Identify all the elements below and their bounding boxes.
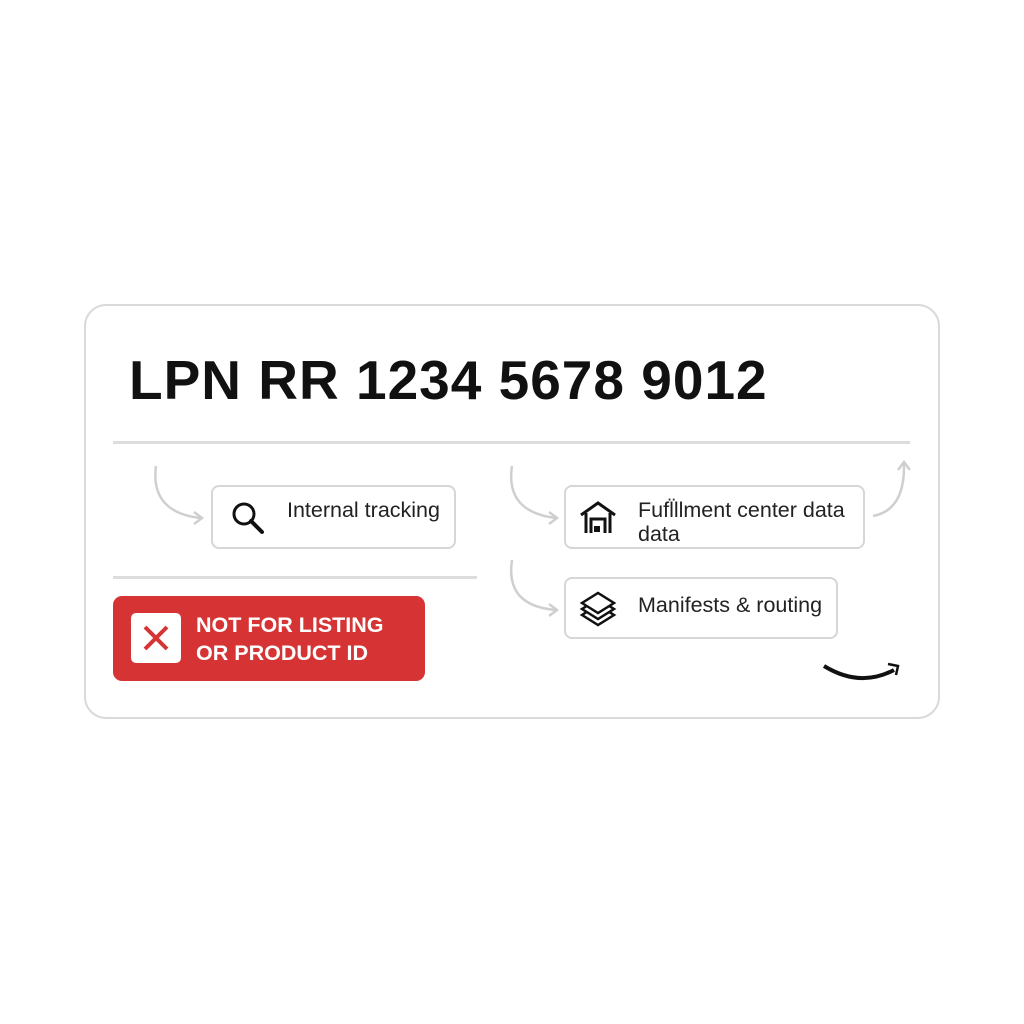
box: internal tracking	[211, 485, 456, 549]
icon: x	[131, 613, 181, 663]
icon: stack	[580, 592, 616, 626]
box: internal tracking: Internal tracking	[287, 498, 440, 522]
box: fulfillment: data	[638, 522, 680, 546]
icon: magnifier	[232, 502, 264, 534]
logo: smile	[823, 662, 900, 680]
title: LPN RR 1234 5678 9012	[129, 349, 768, 411]
badge: not for listing: NOT FOR LISTING	[196, 613, 384, 637]
icon: warehouse	[580, 501, 616, 533]
box: fulfillment	[564, 485, 865, 549]
card	[84, 304, 940, 719]
badge: not for listing	[113, 596, 425, 681]
box: fulfillment: Fufl̈llment center data	[638, 498, 845, 522]
badge: not for listing: OR PRODUCT ID	[196, 641, 368, 665]
box: manifests	[564, 577, 838, 639]
box: manifests: Manifests & routing	[638, 593, 822, 617]
